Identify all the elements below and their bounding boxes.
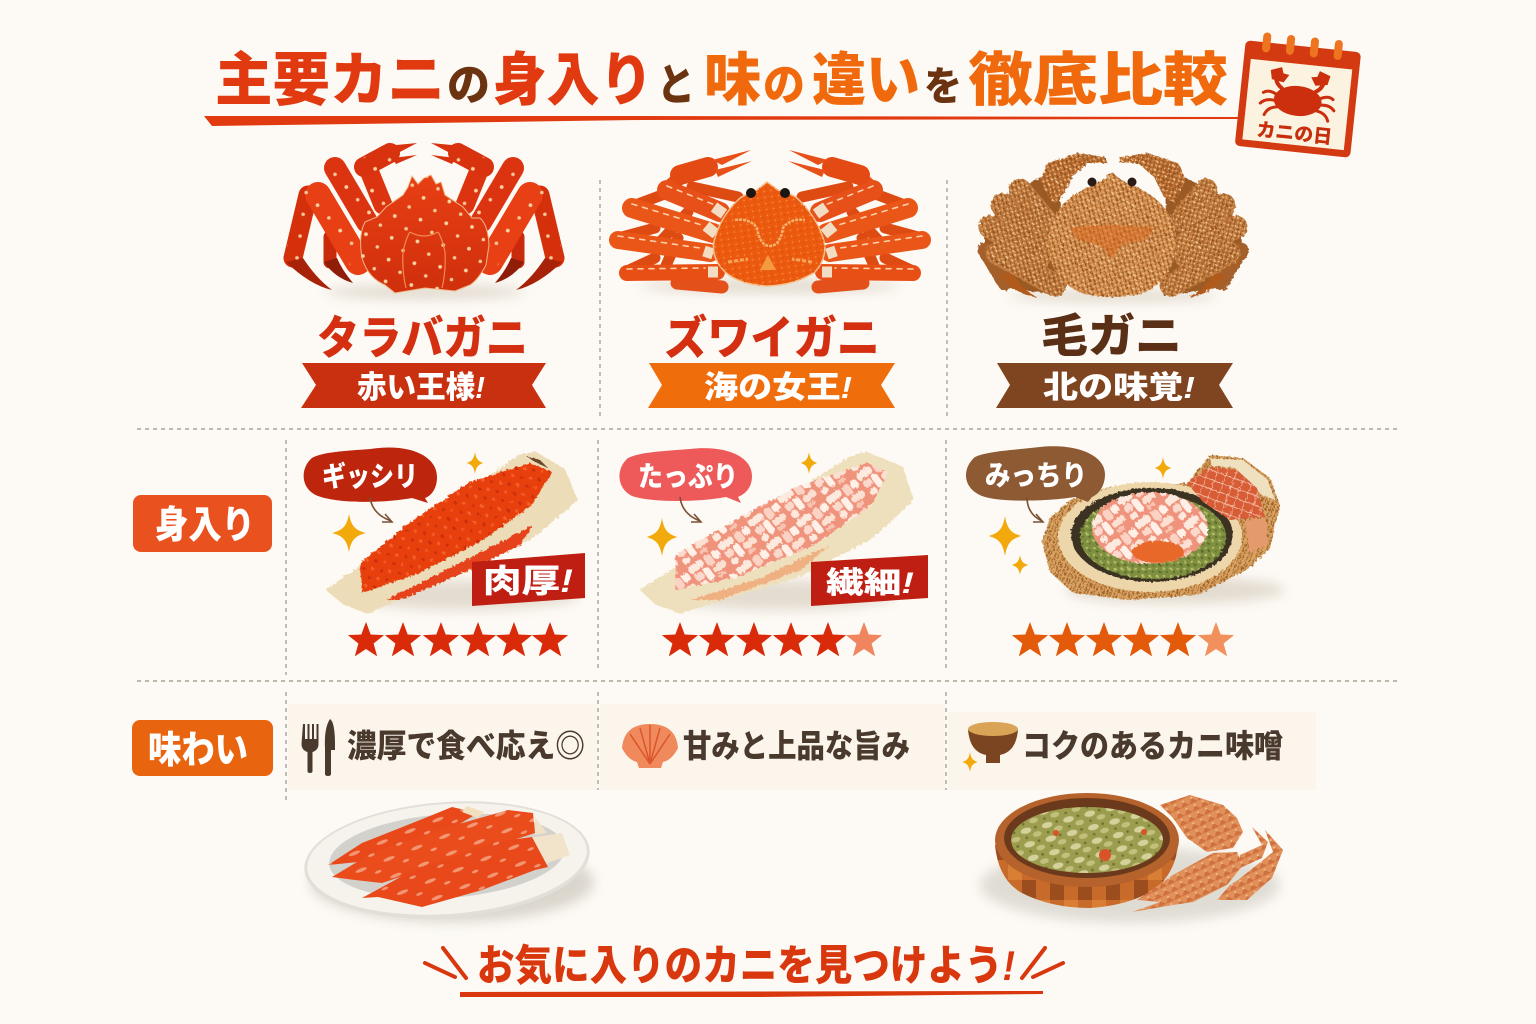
- title: 違い: [812, 48, 920, 113]
- title: の: [763, 61, 805, 110]
- illustration: king crab leg meat: [328, 453, 580, 612]
- illustration: plate of crab legs: [300, 792, 594, 928]
- ribbon: 北の味覚: [996, 363, 1233, 408]
- icon: calendar カニの日: カニの日: [1255, 119, 1333, 149]
- closing underline: [460, 991, 1043, 997]
- rating stars: [1012, 622, 1234, 656]
- sparkle: [647, 518, 677, 556]
- panel: ズワイガニ: [618, 150, 922, 408]
- rating stars: [662, 622, 882, 656]
- title: [215, 48, 1228, 113]
- taste: ズワイガニ: [622, 724, 910, 768]
- row label: 味わい: 味わい: [148, 730, 248, 772]
- sparkle small: [801, 452, 817, 474]
- text: taste: 濃厚で食べ応え◎: [347, 728, 585, 764]
- arrow: [680, 497, 701, 522]
- arrow: [1027, 497, 1043, 522]
- panel: タラバガニ: [286, 143, 562, 408]
- heading: 毛ガニ: 毛ガニ: [1041, 310, 1182, 362]
- title: 身入り: [493, 48, 653, 113]
- burst lines right: [1022, 948, 1063, 978]
- title: 徹底比較: [968, 48, 1228, 113]
- panel: 毛ガニ: [984, 153, 1242, 408]
- taste strips background: [288, 704, 1316, 790]
- illustration: hairy crab: [984, 153, 1242, 302]
- text: taste: コクのあるカニ味噌: [1022, 728, 1283, 764]
- title: と: [657, 61, 695, 110]
- cell: タラバガニ 身入り: [304, 448, 585, 656]
- sparkle small: [1012, 555, 1028, 575]
- row label: 身入り: [133, 495, 272, 552]
- heading: ズワイガニ: ズワイガニ: [664, 312, 880, 364]
- ribbon: 海の女王: 海の女王 !: [704, 370, 852, 405]
- ribbon: 海の女王: [648, 363, 895, 408]
- row label: 身入り: 身入り: [155, 505, 255, 547]
- callout: 繊細: [811, 555, 928, 606]
- title: 主要カニ: [215, 48, 445, 113]
- heading: タラバガニ: タラバガニ: [317, 312, 528, 364]
- sparkle small: [467, 452, 483, 474]
- illustration: kani miso bowl and claws: [980, 793, 1283, 923]
- cell: 毛ガニ 身入り: [966, 446, 1285, 656]
- title: を: [924, 65, 962, 109]
- divider lines: [137, 180, 1400, 802]
- bubble: たっぷり: [619, 448, 752, 503]
- taste: タラバガニ: [302, 719, 585, 776]
- sparkle: [962, 752, 978, 772]
- sparkle small: [1155, 457, 1171, 479]
- title: 味: [704, 48, 761, 113]
- sparkle: [332, 514, 366, 552]
- ribbon: 赤い王様: 赤い王様!: [357, 370, 485, 405]
- illustration: king crab: [286, 143, 562, 299]
- rating stars: [348, 622, 568, 656]
- icon: bowl: [968, 722, 1018, 763]
- icon: fork and knife: [302, 719, 335, 776]
- callout: 肉厚: [472, 553, 585, 606]
- bubble: みっちり: [966, 446, 1105, 502]
- icon: calendar カニの日: [1235, 30, 1362, 158]
- icon: scallop shell: [622, 724, 678, 768]
- illustration: snow crab: [618, 150, 922, 293]
- burst lines left: [425, 948, 466, 978]
- bubble: ギッシリ: [304, 448, 437, 503]
- closing message: お気に入りのカニを見つけよう!: [477, 942, 1015, 989]
- cell: ズワイガニ 身入り: [619, 448, 928, 656]
- text: taste: 甘みと上品な旨み: [683, 728, 910, 764]
- callout: 繊細: 繊細 !: [826, 567, 914, 600]
- row label: 味わい: [132, 720, 273, 776]
- ribbon: 赤い王様: [301, 363, 546, 408]
- illustration: snow crab leg meat: [642, 453, 912, 612]
- title: の: [447, 61, 490, 110]
- illustration: crab shell with meat: [1042, 455, 1285, 604]
- callout: 肉厚: 肉厚 !: [483, 563, 573, 599]
- bubble: たっぷり: たっぷり: [638, 461, 738, 492]
- sparkle: [989, 516, 1021, 556]
- bubble: みっちり: みっちり: [985, 460, 1087, 491]
- taste: 毛ガニ: [962, 722, 1283, 772]
- title underline: [204, 116, 1240, 126]
- ribbon: 北の味覚: 北の味覚 !: [1043, 370, 1195, 405]
- bubble: ギッシリ: ギッシリ: [322, 461, 418, 492]
- arrow: [370, 497, 392, 522]
